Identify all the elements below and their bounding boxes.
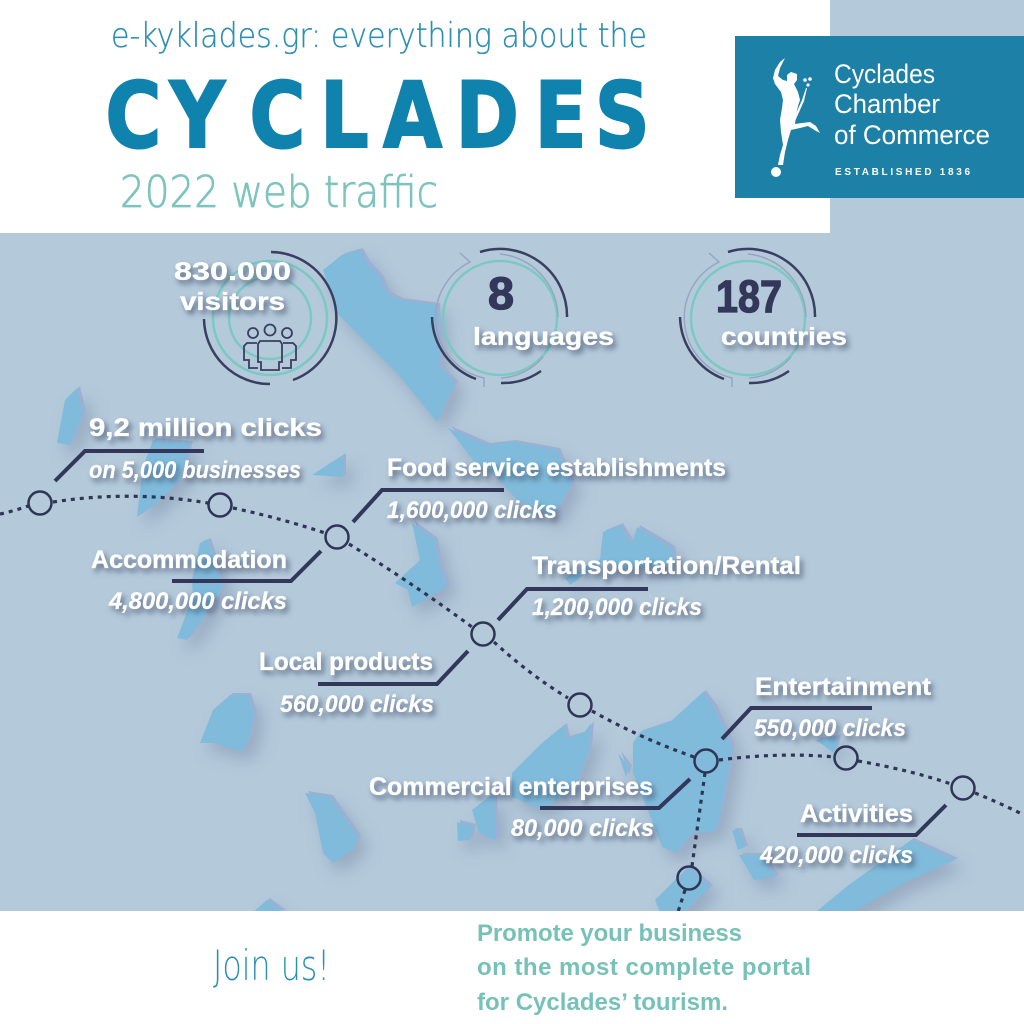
title intro line: e-kyklades.gr: everything about the (111, 16, 647, 56)
callout: total clicks: on 5,000 businesses (89, 457, 301, 484)
callout: commercial enterprises (369, 773, 690, 842)
island: Tinos (448, 428, 572, 517)
callout: total clicks (55, 414, 322, 484)
route nodes (28, 492, 974, 890)
island: Donousa (816, 737, 838, 753)
island: Mykonos (565, 525, 675, 585)
subtitle: 2022 web traffic (120, 167, 438, 218)
icon: people (244, 324, 296, 370)
value: 187 (716, 271, 782, 322)
island: Naxos (633, 692, 732, 853)
callout: activities: 420,000 clicks (759, 842, 913, 869)
callout: accommodation: Accommodation (91, 546, 287, 574)
logo name: of Commerce (834, 120, 990, 150)
callout: food service: 1,600,000 clicks (387, 497, 557, 524)
callout: entertainment: Entertainment (755, 673, 932, 701)
map of the Cyclades islands (57, 250, 955, 912)
promotional text (477, 920, 811, 1016)
logo name: Cyclades (834, 59, 935, 89)
callout: entertainment: 550,000 clicks (754, 715, 906, 742)
label: visitors (180, 288, 285, 316)
stat: 8 languages (432, 249, 614, 387)
stat: 830.000 visitors (174, 252, 336, 384)
island: Andros (323, 250, 455, 422)
island: Ios (655, 867, 710, 912)
callout: accommodation: 4,800,000 clicks (108, 588, 287, 615)
island: Paros (512, 723, 591, 810)
promotional text: Promote your business (477, 920, 742, 947)
island: Antiparos (472, 793, 496, 840)
island: Small Cyclades (732, 830, 745, 850)
callout: food service: Food service establishments (387, 454, 726, 482)
promotional text: on the most complete portal (477, 954, 811, 981)
island: bottom left (253, 900, 283, 912)
island: Milos (305, 793, 358, 863)
label: countries (721, 323, 847, 351)
value: 830.000 (174, 258, 291, 286)
dotted route line (0, 496, 1024, 912)
callout: food service (353, 454, 726, 524)
callout: local products: 560,000 clicks (280, 691, 434, 718)
icon: Hermes figure (771, 58, 820, 177)
callout: activities: Activities (800, 800, 913, 828)
logo panel (735, 36, 1024, 198)
island: islet west of Antiparos (457, 822, 473, 841)
callout: local products: Local products (259, 648, 433, 676)
callout: total clicks: 9,2 million clicks (89, 414, 322, 442)
header panel (0, 0, 830, 233)
footer panel (0, 911, 1024, 1024)
logo name: Chamber (834, 89, 940, 119)
callout: transportation (498, 552, 801, 621)
callout: commercial enterprises: Commercial enterprises (369, 773, 653, 801)
callout: transportation: Transportation/Rental (532, 552, 801, 580)
value: 8 (488, 268, 514, 319)
island: small islet (312, 455, 343, 477)
label: languages (473, 323, 614, 351)
island: Amorgos (816, 840, 955, 912)
callout: commercial enterprises: 80,000 clicks (511, 815, 654, 842)
island: Serifos (177, 540, 223, 640)
callout: activities (759, 800, 946, 869)
stat: 187 countries (680, 249, 847, 387)
logo tagline: ESTABLISHED 1836 (835, 167, 970, 178)
title CYCLADES: CYCLADES (105, 63, 650, 169)
callout: local products (259, 648, 468, 718)
island: sliver by Naxos (618, 753, 629, 777)
island: Sifnos (200, 695, 254, 751)
promotional text: for Cyclades’ tourism. (477, 989, 728, 1016)
callout: transportation: 1,200,000 clicks (532, 594, 702, 621)
callout: entertainment (722, 673, 932, 742)
island: Kythnos (137, 440, 190, 517)
join us text: Join us! (213, 941, 330, 990)
logo name (834, 59, 990, 150)
island: Small Cyclades 2 (739, 855, 776, 880)
island: Syros (395, 523, 447, 607)
callout: accommodation (91, 546, 321, 615)
island: Kea (57, 388, 83, 445)
